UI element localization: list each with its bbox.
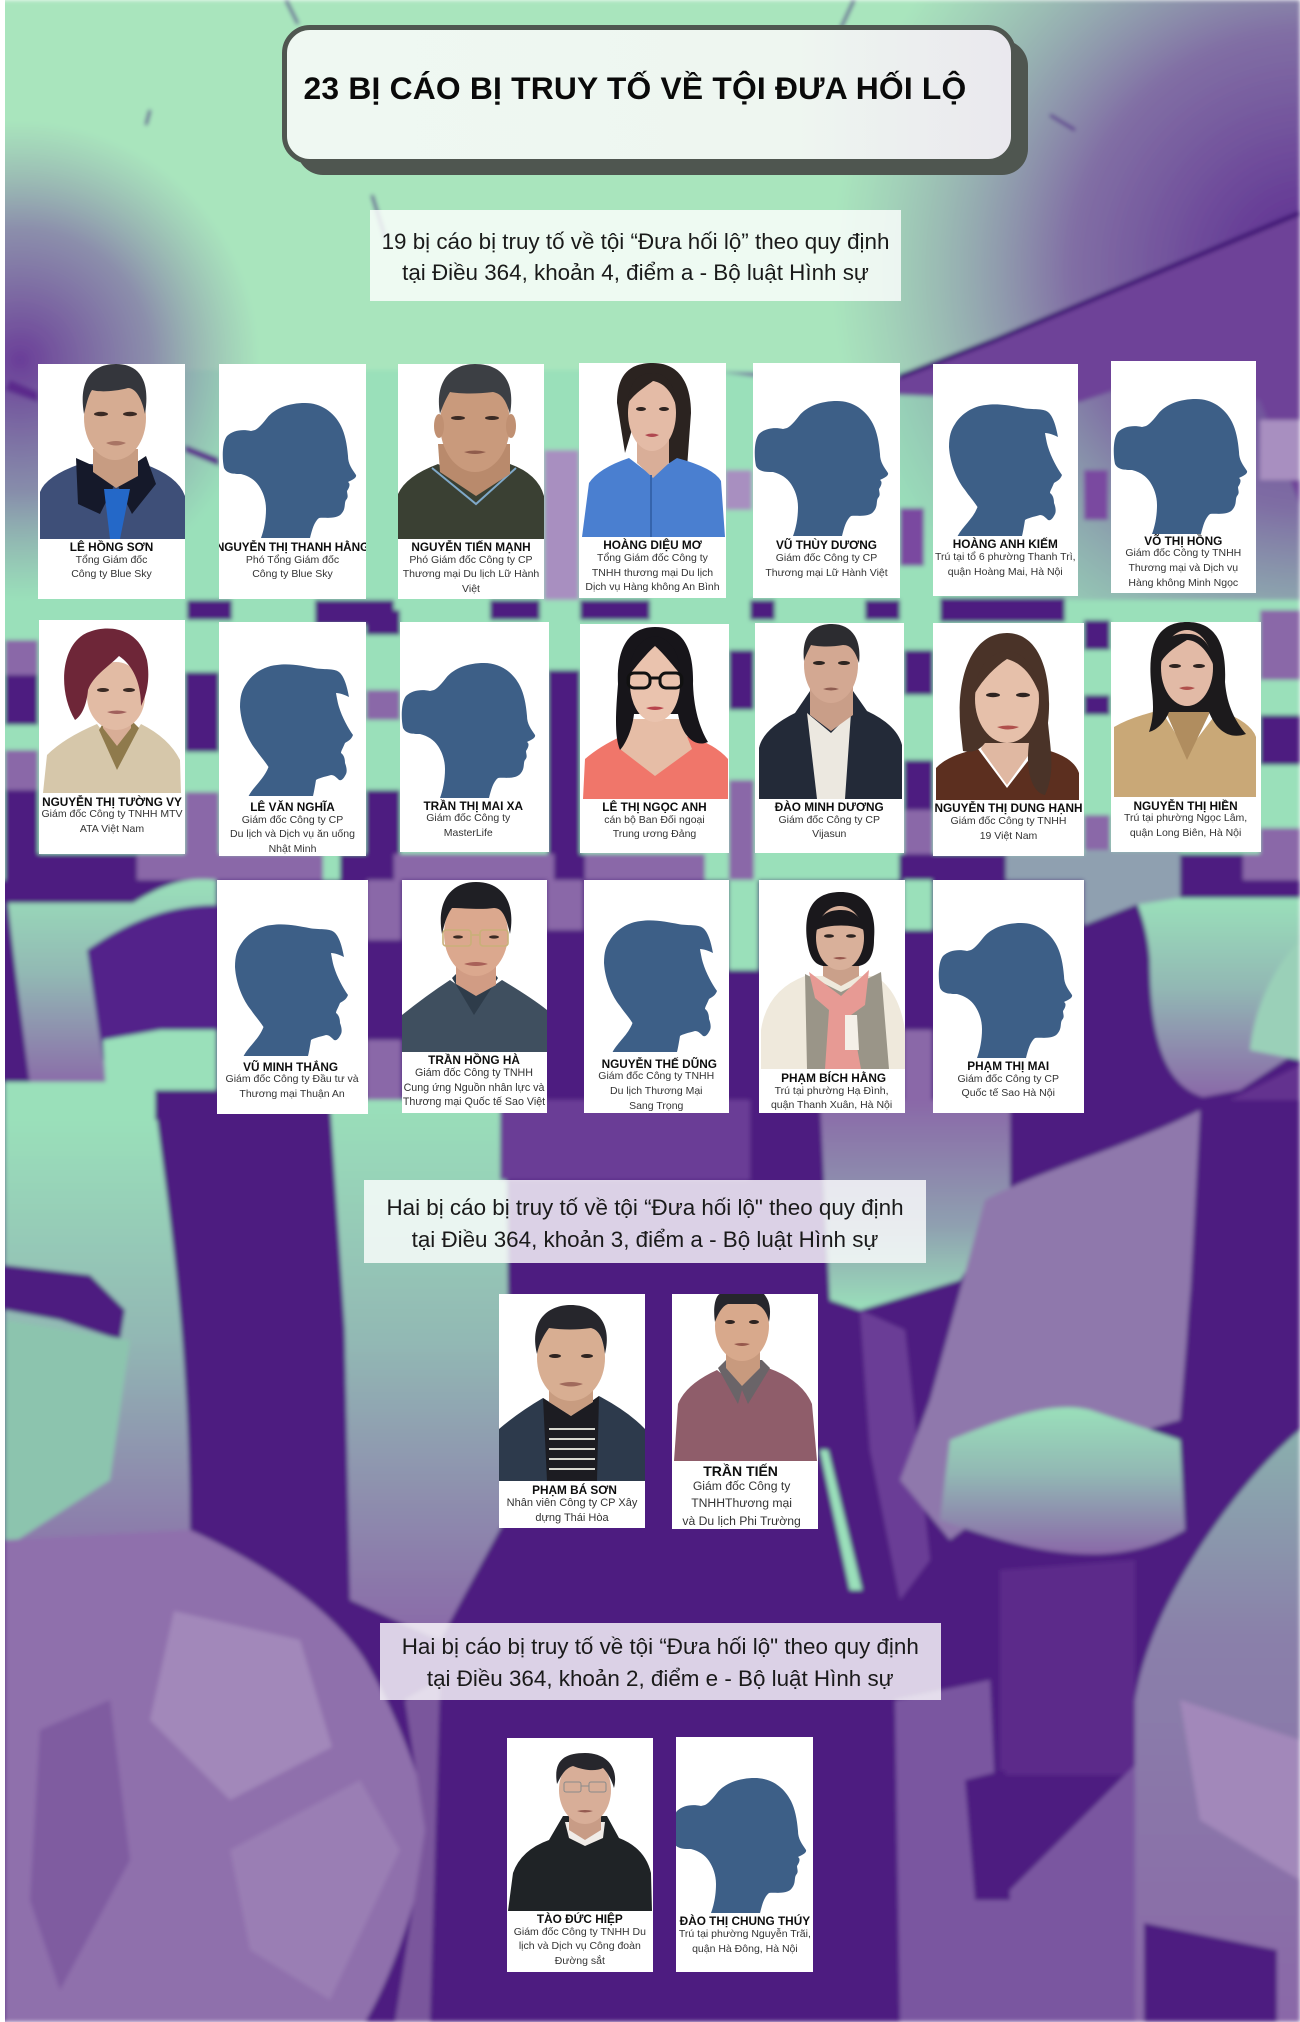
role [656,1478,828,1530]
role: Thương mại và Dịch vụ [1128,562,1238,574]
role: Giám đốc Công ty CP [957,1073,1059,1085]
name: NGUYỄN THỊ TƯỜNG VY [42,795,182,809]
role [246,554,339,580]
card: Đào Thị Chung Thúy [676,1737,813,1972]
role: Giám đốc Công ty CP [776,552,877,564]
row 3 [0,880,1300,1120]
role: Giám đốc Công ty TNHH Du [514,1926,646,1938]
role: Trú tại phường Hạ Đình, [775,1085,889,1097]
role: Giám đốc Công ty Đầu tư và [226,1073,359,1085]
card: Nguyễn Tiến Mạnh [398,364,544,599]
photo [43,628,181,793]
role: Tổng Giám đốc [76,554,147,566]
role: Giám đốc Công ty [693,1479,790,1493]
role [598,1070,714,1112]
name: HOÀNG ANH KIẾM [953,537,1058,551]
role [951,815,1066,842]
name: VŨ MINH THẮNG [243,1060,338,1074]
role: Trú tại phường Ngọc Lâm, [1124,812,1247,824]
role [935,551,1076,578]
role: Quốc tế Sao Hà Nội [962,1087,1055,1099]
role: Giám đốc Công ty TNHH [1125,547,1241,559]
name: TRẦN THỊ MAI XA [423,799,523,813]
card: Hoàng Diệu Mơ [579,363,726,598]
role: Trú tại phường Nguyễn Trãi, [679,1928,811,1940]
role: ATA Việt Nam [80,823,144,835]
role [507,1497,638,1524]
role: quận Long Biên, Hà Nội [1130,827,1241,839]
role: Tổng Giám đốc Công ty [597,552,708,564]
role [771,1085,892,1111]
role: quận Thanh Xuân, Hà Nội [771,1099,892,1111]
role [497,1925,663,1968]
card: Nguyễn Thị Hiền [1111,622,1261,852]
role: Đường sắt [555,1955,605,1967]
heading: section 3: Hai bị cáo bị truy tố về tội “Đưa hối lộ" theo quy định [402,1634,919,1659]
seat gaps upper [187,598,1065,625]
title: 23 BỊ CÁO BỊ TRUY TỐ VỀ TỘI ĐƯA HỐI LỘ [304,70,966,106]
card: Võ Thị Hồng [1111,361,1256,593]
role: Dịch vụ Hàng không An Bình [585,581,720,593]
heading: section 2 [364,1180,926,1263]
role: TNHH thương mại Du lịch [592,567,713,579]
role: Vijasun [812,828,846,840]
name: PHẠM BÍCH HẰNG [781,1071,886,1085]
role: Du lịch Thương Mại [610,1085,702,1097]
card: Tào Đức Hiệp [507,1738,653,1972]
photo [40,364,185,539]
role: quận Hà Đông, Hà Nội [692,1943,798,1955]
name: NGUYỄN TIẾN MẠNH [411,540,531,554]
role: Nhân viên Công ty CP Xây [507,1497,637,1509]
role: TNHHThương mại [691,1496,792,1510]
role: Thương mại Thuận An [239,1088,345,1100]
role: Phó Tổng Giám đốc [246,554,339,566]
photo [759,624,902,799]
role: Thương mại Du lịch Lữ Hành [403,568,539,580]
name: PHẠM BÁ SƠN [532,1483,617,1497]
card: Phạm Bích Hằng [759,880,905,1113]
role [71,554,152,580]
role: Hàng không Minh Ngọc [1128,577,1238,589]
role: quận Hoàng Mai, Hà Nội [948,566,1063,578]
role: Giám đốc Công ty CP [778,814,880,826]
photo [582,363,725,537]
role: Du lịch và Dịch vụ ăn uống [230,828,355,840]
role: 19 Việt Nam [980,830,1037,842]
title box shadow [297,40,1028,175]
photo [402,882,547,1052]
silhouette [949,404,1062,536]
heading: section 3 [380,1623,941,1700]
role [666,1927,823,1956]
lower left figures [330,1100,508,1640]
role [403,554,539,595]
role: lịch và Dịch vụ Công đoàn [519,1940,641,1952]
card: Vũ Thùy Dương [753,363,900,598]
role: và Du lịch Phi Trường [682,1514,801,1528]
role [230,814,355,855]
role [957,1073,1059,1099]
role: Công ty Blue Sky [71,568,152,580]
card: Lê Văn Nghĩa [219,622,366,856]
card: Nguyễn Thị Dung Hạnh [933,623,1084,856]
heading: section 1: tại Điều 364, khoản 4, điểm a - Bộ luật Hình sự [402,260,869,285]
role: Phó Giám đốc Công ty CP [409,554,533,566]
name: NGUYỄN THỊ DUNG HẠNH [934,801,1083,815]
role: Trung ương Đảng [613,828,696,840]
card: Đào Minh Dương [754,623,904,853]
heading: section 3: tại Điều 364, khoản 2, điểm e - Bộ luật Hình sự [427,1666,894,1691]
silhouette [754,401,888,536]
name: ĐÀO THỊ CHUNG THÚY [680,1914,810,1928]
role: Việt [462,583,480,595]
card: Phạm Bá Sơn [499,1294,645,1528]
photo [672,1294,818,1461]
role [426,812,510,839]
card: Trần Tiến [672,1294,818,1529]
role [778,814,880,840]
lower right figures [820,1100,1010,1310]
silhouette [222,403,356,538]
name: VÕ THỊ HỒNG [1144,534,1222,548]
photo [507,1738,653,1911]
silhouette [604,920,717,1052]
role: Thương mại Lữ Hành Việt [765,567,888,579]
role [41,808,182,835]
role: dựng Thái Hòa [535,1512,609,1524]
card: Hoàng Anh Kiếm [933,364,1078,596]
card: Nguyễn Thị Thanh Hằng [219,364,366,599]
name: TRẦN TIẾN [703,1463,778,1479]
name: LÊ VĂN NGHĨA [250,800,335,814]
silhouette [669,1739,816,1914]
name: TRẦN HỒNG HÀ [428,1053,520,1067]
card: Nguyễn Thế Dũng [584,880,729,1113]
photo [1114,622,1256,797]
photo [398,364,544,539]
role: Giám đốc Công ty [426,812,510,824]
role [604,814,705,840]
role: Thương mại Quốc tế Sao Việt [403,1096,545,1108]
name: TÀO ĐỨC HIỆP [537,1912,623,1926]
heading: section 1 [370,210,901,301]
card: Trần Hồng Hà [402,880,546,1113]
photo [936,633,1079,800]
name: ĐÀO MINH DƯƠNG [775,800,884,814]
name: NGUYỄN THẾ DŨNG [602,1057,717,1071]
silhouette [1114,399,1248,534]
role: Giám đốc Công ty TNHH [951,815,1066,827]
title [282,25,1016,164]
role: Giám đốc Công ty TNHH [598,1070,714,1082]
silhouette [235,924,348,1056]
role: Giám đốc Công ty TNHH [415,1067,533,1079]
silhouette [938,923,1072,1058]
name: LÊ HỒNG SƠN [70,540,153,554]
card: Trần Thị Mai Xa [400,622,548,852]
photo [499,1305,645,1481]
photo [583,627,728,799]
role [765,552,888,579]
role: Sang Trọng [629,1100,683,1112]
role: Giám đốc Công ty TNHH MTV [41,808,182,820]
role [1125,547,1241,589]
role [585,552,720,593]
card: Phạm Thị Mai [932,880,1084,1113]
name: LÊ THỊ NGỌC ANH [602,800,707,814]
heading: section 2: tại Điều 364, khoản 3, điểm a - Bộ luật Hình sự [412,1227,878,1252]
heading: section 2: Hai bị cáo bị truy tố về tội “Đưa hối lộ" theo quy định [386,1195,904,1220]
card: Lê Thị Ngọc Anh [580,624,729,853]
name: NGUYỄN THỊ HIỀN [1133,799,1238,813]
heading: section 1: 19 bị cáo bị truy tố về tội “Đưa hối lộ” theo quy định [382,229,889,254]
name: PHẠM THỊ MAI [967,1059,1049,1073]
role: cán bộ Ban Đối ngoại [604,814,705,826]
role: Nhật Minh [269,843,316,855]
role: Giám đốc Công ty CP [242,814,343,826]
photo [761,892,905,1069]
role [226,1073,359,1100]
name: HOÀNG DIỆU MƠ [603,538,702,552]
role: Công ty Blue Sky [252,568,333,580]
role: MasterLife [444,827,493,839]
name: VŨ THÙY DƯƠNG [776,538,877,552]
role: Trú tại tổ 6 phường Thanh Trì, [935,551,1076,563]
card: Vũ Minh Thắng [217,880,368,1114]
role [1124,812,1247,839]
role [403,1067,545,1108]
card: Lê Hồng Sơn [38,364,185,599]
silhouette [240,664,353,796]
role: Cung ứng Nguồn nhân lực và [404,1082,544,1094]
card: Nguyễn Thị Tường Vy [39,620,185,854]
silhouette [402,663,536,798]
